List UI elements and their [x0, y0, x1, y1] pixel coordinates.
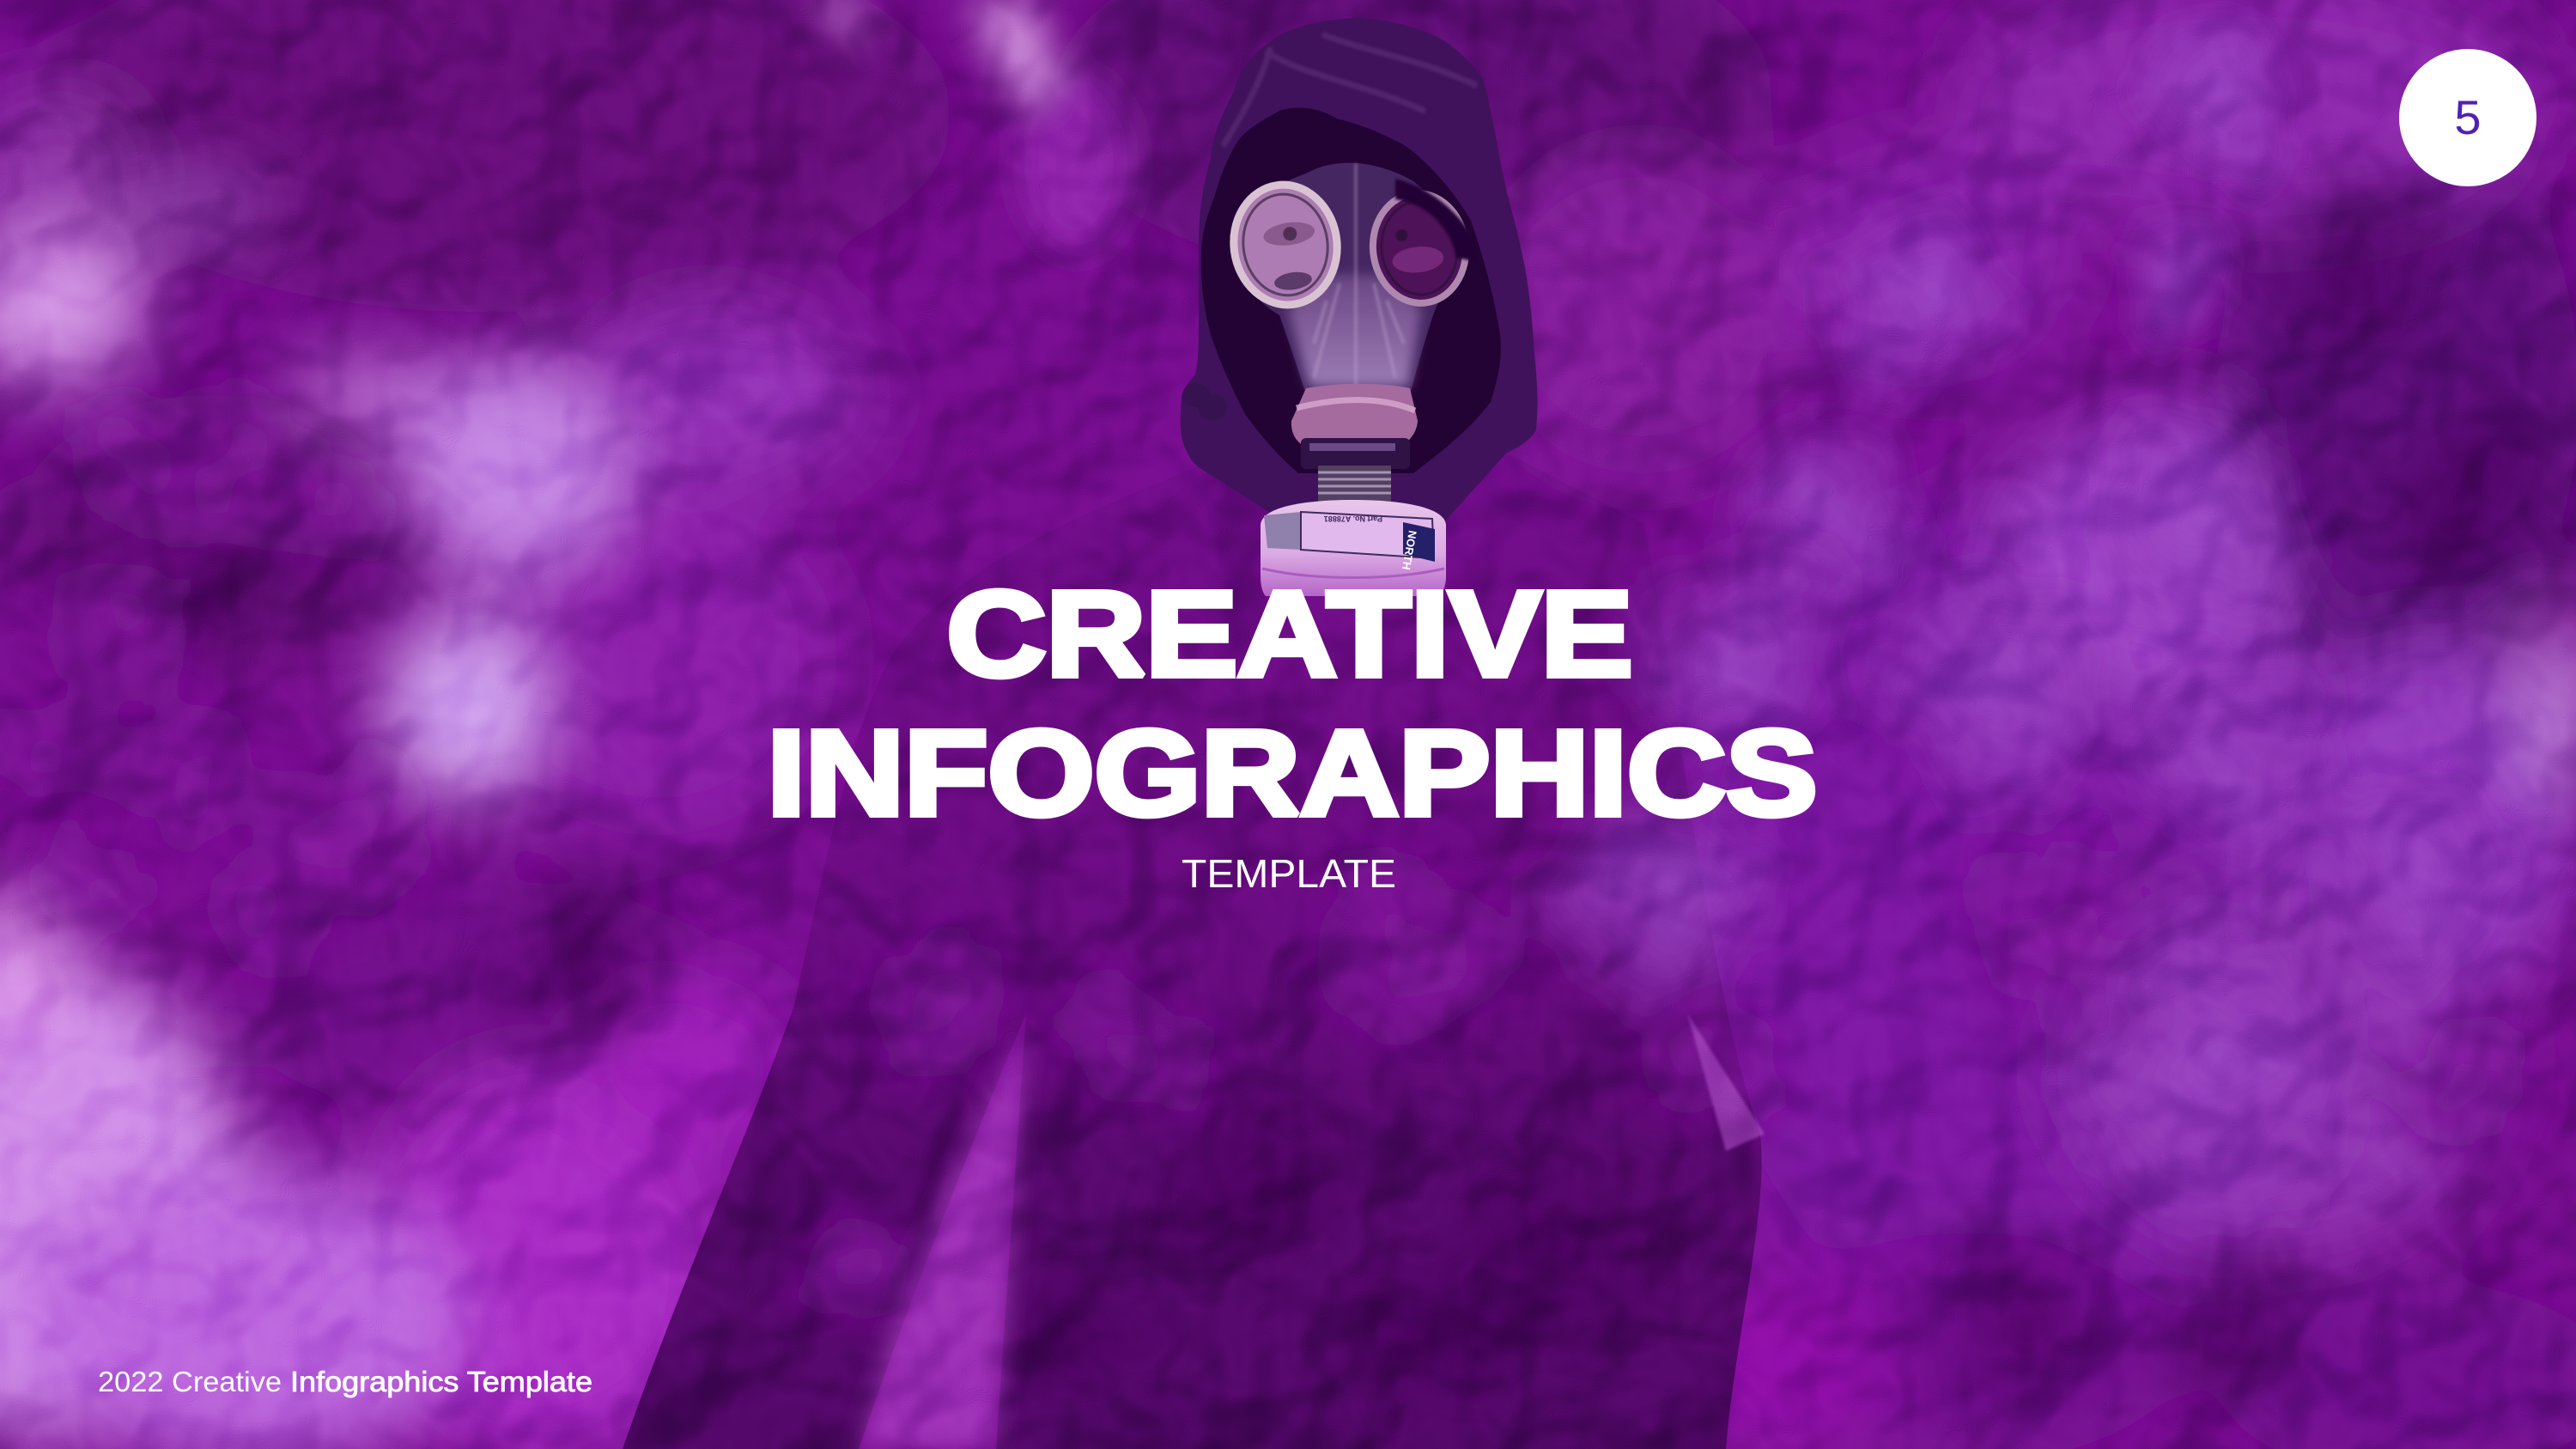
canister brand tag: NORTH: [1400, 529, 1419, 571]
hood folds: [1223, 34, 1477, 146]
canister label: [1301, 512, 1434, 558]
canister grey band: [1264, 512, 1301, 550]
title line 2: INFOGRAPHICS: [768, 704, 1817, 840]
footer text: Infographics Template: [290, 1366, 592, 1397]
hood toggle: [1182, 383, 1227, 420]
mask face: [1230, 163, 1453, 394]
person: gas mask head: [1181, 18, 1537, 596]
icon: hood: [1181, 18, 1537, 524]
hood opening: [1201, 107, 1501, 473]
page number badge: [2399, 49, 2537, 186]
mask lit area: [1288, 275, 1421, 387]
smoke over body: [764, 509, 1889, 1438]
smoke: bright streaks top: [813, 0, 1133, 255]
mask thread: [1318, 466, 1391, 502]
mask ribs: [1314, 163, 1404, 387]
canister: [1261, 500, 1446, 596]
canister brand tag: [1400, 522, 1435, 571]
footer text: 2022 Creative: [98, 1366, 282, 1397]
page number badge: 5: [2454, 90, 2482, 144]
mask connector: [1301, 438, 1410, 469]
right lens: [1368, 189, 1471, 307]
footer text: [98, 1366, 592, 1397]
person: body silhouette: [623, 455, 1889, 1449]
smoke: left dark cloud: [0, 345, 714, 1076]
title: [768, 565, 1817, 840]
smoke: right cloud puffs: [1684, 0, 2576, 1446]
subtitle: TEMPLATE: [1182, 851, 1396, 896]
title line 1: CREATIVE: [946, 565, 1633, 701]
left lens: [1226, 178, 1345, 312]
mask collar: [1291, 384, 1418, 447]
light gap beside arm: [859, 1022, 1026, 1449]
figure body: [623, 455, 1762, 1449]
light seam right arm: [1687, 1014, 1765, 1151]
hood shadow over right lens: [1395, 179, 1479, 262]
canister part number: Part No. A78881: [1324, 514, 1382, 523]
smoke: left highlights: [0, 173, 635, 1449]
